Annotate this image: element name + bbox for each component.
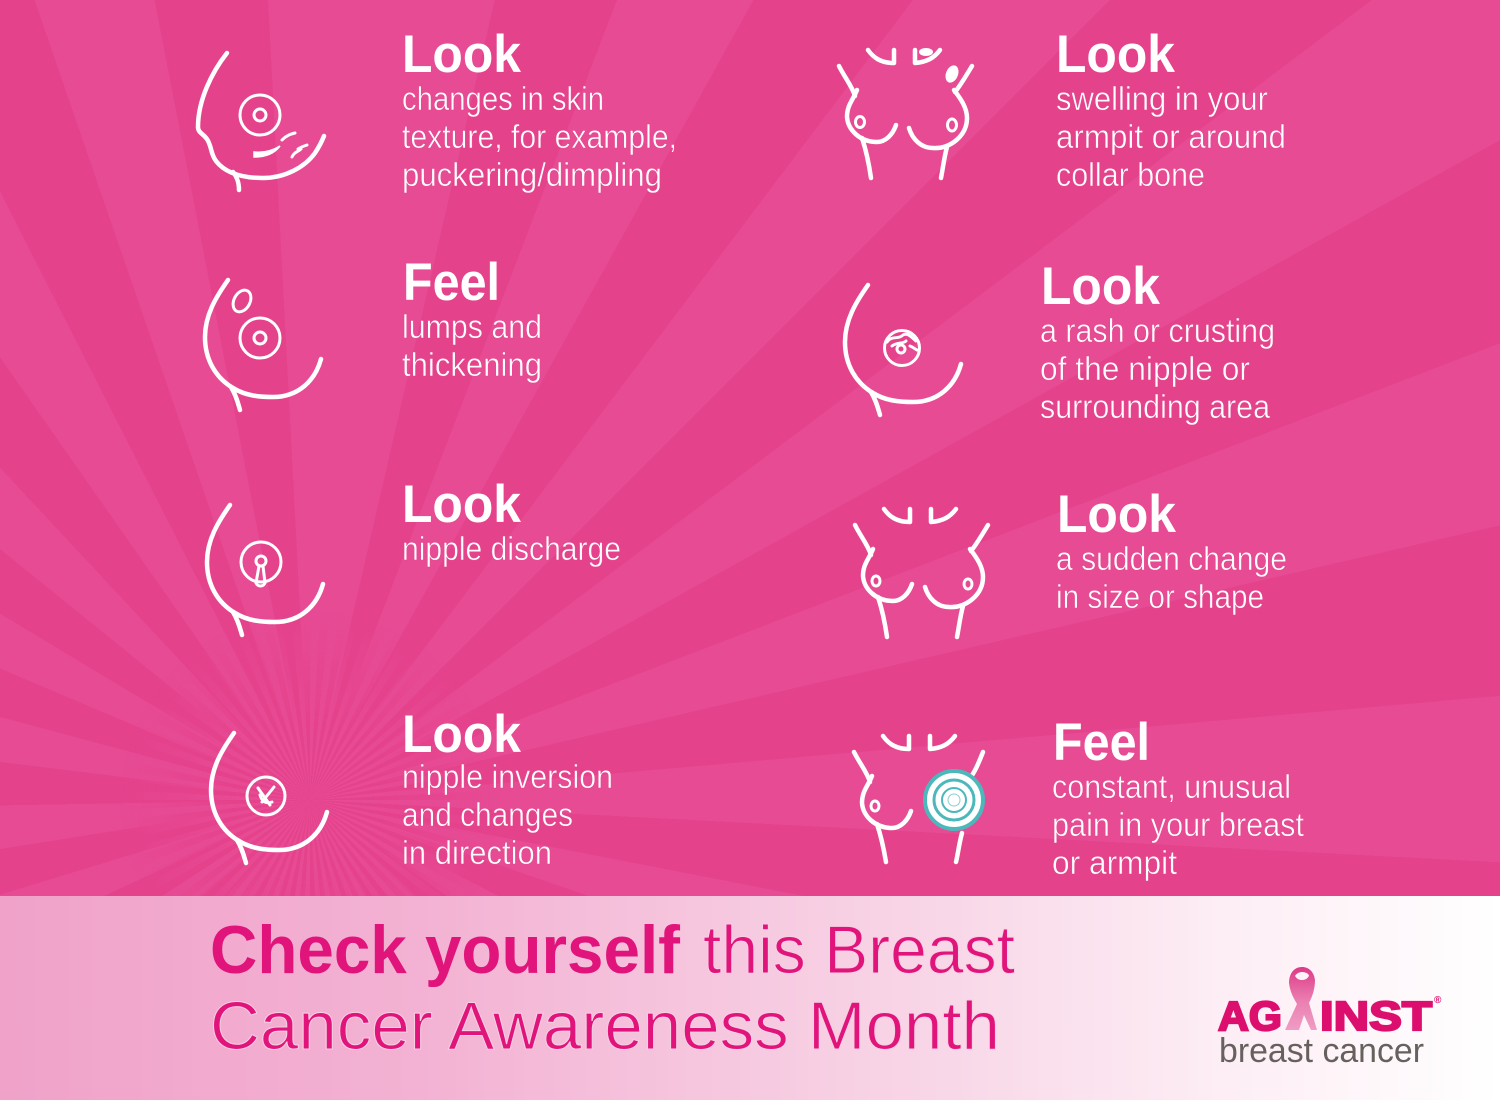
icon: pink ribbon	[1285, 967, 1317, 1030]
heading: Look: Look	[1057, 485, 1176, 544]
text: nipple inversion: and changes	[402, 796, 573, 833]
text: nipple discharge: nipple discharge	[402, 530, 621, 567]
panel: lumps	[205, 253, 542, 410]
heading: Look: Look	[402, 705, 521, 764]
title: Check yourself	[210, 912, 680, 988]
panel: skin texture	[198, 25, 677, 193]
text: size change: a sudden change	[1056, 540, 1287, 577]
icon: breast with nipple discharge	[207, 505, 323, 635]
title: Cancer Awareness Month	[210, 988, 1000, 1064]
icon: breast with inverted nipple	[211, 733, 327, 863]
panel: discharge	[207, 475, 621, 635]
text: pain	[1052, 768, 1304, 881]
icon: breast with rash on nipple	[845, 285, 961, 415]
text: rash: of the nipple or	[1040, 350, 1250, 387]
panel: rash	[845, 257, 1275, 425]
panel: size change	[855, 485, 1287, 637]
heading: Feel: Feel	[403, 253, 500, 312]
logo: Against Breast Cancer: INST	[1320, 993, 1432, 1039]
icon: torso with changed shape	[855, 509, 988, 637]
text: rash	[1040, 312, 1275, 425]
text: skin changes	[402, 80, 677, 193]
icon: torso with pain target	[854, 736, 983, 862]
panel: pain	[854, 713, 1304, 881]
heading: Look: Look	[1056, 25, 1175, 84]
text: size change	[1056, 540, 1287, 615]
icon: breast with skin dimpling	[198, 53, 324, 190]
text: skin changes: texture, for example,	[402, 118, 677, 155]
text: skin changes: puckering/dimpling	[402, 156, 662, 193]
text: nipple inversion	[402, 758, 613, 871]
text: swelling: swelling in your	[1056, 80, 1268, 117]
heading: Look: Look	[402, 25, 521, 84]
bottom banner background	[0, 896, 1500, 1100]
text: swelling: armpit or around	[1056, 118, 1286, 155]
logo: Against Breast Cancer: breast cancer	[1219, 1032, 1424, 1070]
panel: swelling	[839, 25, 1286, 193]
text: lumps and thickening	[402, 308, 542, 383]
text: rash: a rash or crusting	[1040, 312, 1275, 349]
heading: Look: Look	[402, 475, 521, 534]
panel: inversion	[211, 705, 613, 871]
title	[210, 912, 1015, 1064]
icon: breast with lump	[205, 280, 321, 410]
text: size change: in size or shape	[1056, 578, 1264, 615]
heading: Feel: Feel	[1053, 713, 1150, 772]
icon: torso with swelling	[839, 48, 972, 178]
text: swelling: collar bone	[1056, 156, 1205, 193]
logo: Against Breast Cancer	[1218, 967, 1442, 1070]
text: pain: or armpit	[1052, 844, 1177, 881]
text: skin changes: changes in skin	[402, 80, 604, 117]
text: rash: surrounding area	[1040, 388, 1271, 425]
logo: Against Breast Cancer: ®	[1434, 995, 1442, 1006]
logo: Against Breast Cancer: AG	[1218, 993, 1282, 1039]
text: pain: constant, unusual	[1052, 768, 1291, 805]
text: pain: pain in your breast	[1052, 806, 1304, 843]
text: nipple inversion: in direction	[402, 834, 552, 871]
title: this Breast	[703, 912, 1015, 988]
heading: Look: Look	[1041, 257, 1160, 316]
text: swelling	[1056, 80, 1286, 193]
text: lumps and thickening: lumps and	[402, 308, 542, 345]
text: lumps and thickening: thickening	[402, 346, 542, 383]
text: nipple inversion: nipple inversion	[402, 758, 613, 795]
